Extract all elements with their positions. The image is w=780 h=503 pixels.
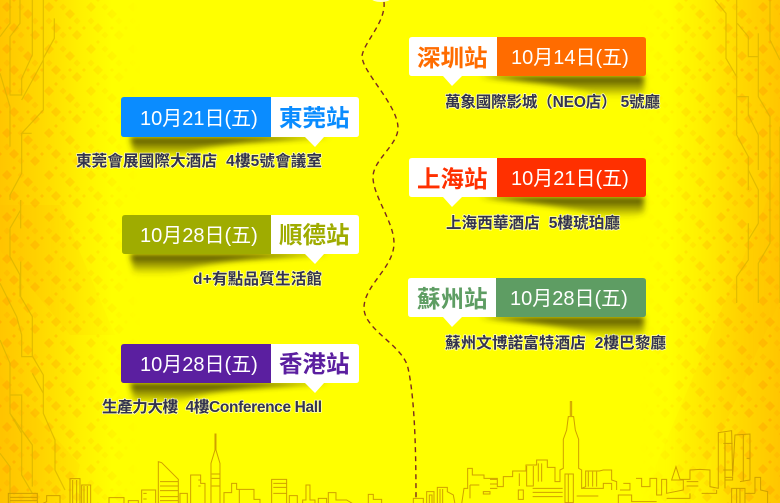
city: 順德站 xyxy=(279,222,350,248)
skyline right xyxy=(413,402,768,503)
shadow xyxy=(480,317,644,338)
city: 上海站 xyxy=(417,166,488,192)
date: 10月14日(五) xyxy=(511,47,629,69)
label box xyxy=(409,158,497,207)
station: Hong Kong xyxy=(102,344,359,416)
date bar xyxy=(497,158,646,197)
date: 10月21日(五) xyxy=(511,168,629,190)
date bar xyxy=(121,344,271,383)
date bar xyxy=(122,215,271,254)
date: 10月21日(五) xyxy=(140,108,258,130)
shadow xyxy=(130,383,330,404)
address: 東莞會展國際大酒店 4樓5號會議室 xyxy=(76,151,322,170)
date bar xyxy=(496,278,646,317)
shadow xyxy=(130,137,330,158)
date: 10月28日(五) xyxy=(140,354,258,376)
station: Shanghai xyxy=(409,158,646,232)
address: 生產力大樓 4樓Conference Hall xyxy=(102,397,322,416)
date bar xyxy=(497,37,646,76)
date: 10月28日(五) xyxy=(510,288,628,310)
date bar xyxy=(121,97,271,137)
city: 蘇州站 xyxy=(417,286,488,312)
station: Shenzhen xyxy=(409,37,660,111)
station: Dongguan xyxy=(76,97,359,170)
label box xyxy=(408,278,496,327)
shadow xyxy=(480,197,644,218)
city: 香港站 xyxy=(279,351,350,377)
shadow xyxy=(480,76,644,97)
skyline left xyxy=(8,434,382,503)
address: 上海西華酒店 5樓琥珀廳 xyxy=(446,213,620,232)
shadow xyxy=(130,254,330,275)
date: 10月28日(五) xyxy=(140,225,258,247)
station: Shunde xyxy=(122,215,359,288)
city: 深圳站 xyxy=(417,45,488,71)
city: 東莞站 xyxy=(279,105,350,131)
label box xyxy=(409,37,497,86)
station: Suzhou xyxy=(408,278,666,352)
label box xyxy=(271,344,359,393)
top white glow xyxy=(371,0,391,2)
address: 蘇州文博諾富特酒店 2樓巴黎廳 xyxy=(445,333,666,352)
label box xyxy=(271,97,359,147)
label box xyxy=(271,215,359,264)
route dashed line xyxy=(362,2,416,498)
address: 萬象國際影城（NEO店） 5號廳 xyxy=(445,92,660,111)
address: d+有點品質生活館 xyxy=(193,269,322,288)
